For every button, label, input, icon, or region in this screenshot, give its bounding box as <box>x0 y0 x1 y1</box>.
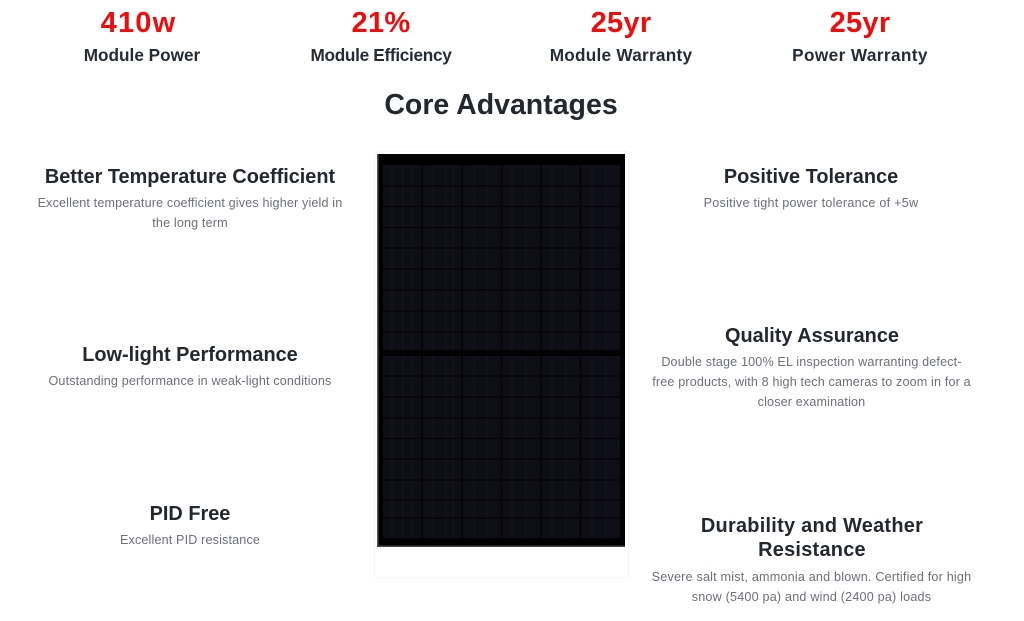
stat: module warranty: Module Warranty <box>550 45 692 65</box>
advantage: better temperature coefficient: the long term <box>152 216 228 230</box>
stat: module efficiency: Module Efficiency <box>310 45 452 65</box>
stat: module warranty <box>550 7 692 65</box>
advantage: low-light performance: Low-light Performance <box>82 344 298 366</box>
advantage: durability and weather resistance <box>652 515 971 604</box>
product image: black solar panel <box>374 151 629 578</box>
stat: module power <box>84 7 200 65</box>
advantage: better temperature coefficient <box>38 166 342 230</box>
advantage: better temperature coefficient: Excellent temperature coefficient gives higher yield in <box>38 196 342 210</box>
stat: module efficiency <box>310 7 452 65</box>
advantage: low-light performance: Outstanding performance in weak-light conditions <box>48 374 332 388</box>
advantage: quality assurance: closer examination <box>758 395 865 409</box>
advantage: positive tolerance: Positive tight power tolerance of +5w <box>704 196 918 210</box>
advantage: low-light performance <box>48 344 332 388</box>
title: Core Advantages <box>384 89 618 121</box>
stat: power warranty: 25yr <box>830 7 890 39</box>
advantage: positive tolerance: Positive Tolerance <box>724 166 898 188</box>
advantage: durability and weather resistance: Severe salt mist, ammonia and blown. Certified for high <box>652 570 971 584</box>
stat: power warranty: Power Warranty <box>792 45 928 65</box>
stat: module warranty: 25yr <box>591 7 651 39</box>
stat: module efficiency: 21% <box>352 7 410 39</box>
advantage: durability and weather resistance: Resistance <box>758 539 866 561</box>
advantage: quality assurance <box>652 325 971 409</box>
advantage: positive tolerance <box>704 166 918 210</box>
advantage: PID free: Excellent PID resistance <box>120 533 260 547</box>
stat: module power: 410w <box>101 7 176 39</box>
advantage: durability and weather resistance: snow (5400 pa) and wind (2400 pa) loads <box>692 590 931 604</box>
advantage: better temperature coefficient: Better Temperature Coefficient <box>45 166 335 188</box>
advantage: PID free: PID Free <box>150 503 230 525</box>
advantage: quality assurance: Double stage 100% EL inspection warranting defect- <box>661 355 962 369</box>
advantage: quality assurance: Quality Assurance <box>725 325 899 347</box>
advantage: PID free <box>120 503 260 547</box>
advantage: durability and weather resistance: Durability and Weather <box>701 515 923 537</box>
stat: power warranty <box>792 7 928 65</box>
advantage: quality assurance: free products, with 8 high tech cameras to zoom in for a <box>652 375 971 389</box>
stat: module power: Module Power <box>84 45 200 65</box>
